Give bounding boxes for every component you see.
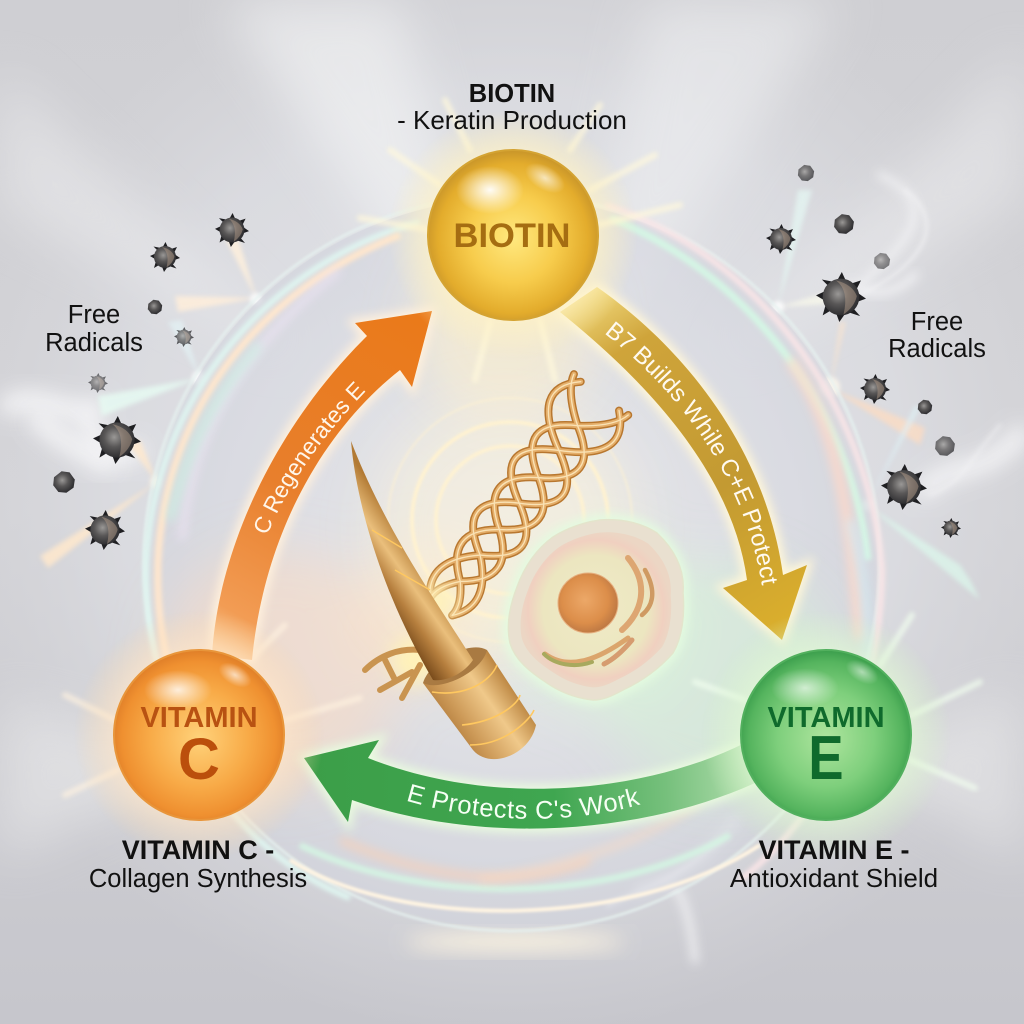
cell: [508, 520, 684, 700]
smoke clouds: [10, 175, 1020, 960]
label: E Protects C's Work: E Protects C's Work: [408, 784, 640, 819]
organelles: [544, 558, 652, 665]
caption: Free Radicals right: [888, 308, 986, 363]
caption: Vitamin E: [730, 835, 938, 893]
sphere: Vitamin C: [74, 610, 324, 860]
caption: Free Radicals right: Free: [911, 308, 963, 336]
caption: Vitamin E: VITAMIN E -: [758, 835, 910, 865]
caption: Biotin: BIOTIN: [469, 80, 555, 108]
arrow: B7 builds while C+E protect: [560, 284, 815, 645]
sphere: Vitamin C: C: [178, 727, 220, 792]
free radicals left: [53, 213, 249, 550]
sphere: Vitamin E: E: [808, 724, 844, 793]
arrow: C regenerates E: [210, 306, 435, 660]
caption: Vitamin C: VITAMIN C -: [122, 835, 274, 865]
caption: Free Radicals right: Radicals: [888, 335, 986, 363]
keratin rope: [410, 371, 632, 630]
nucleus: [558, 573, 618, 633]
light beams between radicals and bubble: [40, 190, 980, 600]
sphere: Vitamin E: [701, 610, 951, 860]
hair strand and follicle: [351, 441, 536, 759]
caption: Vitamin C: Collagen Synthesis: [89, 865, 307, 893]
label: BIOTIN: BIOTIN: [454, 217, 570, 255]
caption: Free Radicals left: Free: [68, 301, 120, 329]
free radicals right: [766, 165, 961, 538]
follicle base: [423, 647, 536, 759]
caption: Biotin: [397, 80, 627, 135]
label: VITAMIN E: VITAMIN: [767, 702, 885, 734]
caption: Vitamin C: [89, 835, 307, 893]
label: VITAMIN C: VITAMIN: [140, 702, 258, 734]
label: B7 Builds While C+E Protect: B7 Builds While C+E Protect: [606, 321, 777, 586]
sphere: Biotin: [388, 110, 638, 360]
arrow: E protects C's work: [300, 733, 754, 836]
caption: Free Radicals left: Radicals: [45, 329, 143, 357]
warm and green colour washes: [160, 240, 840, 800]
caption: Free Radicals left: [45, 301, 143, 357]
sphere glow rays: soft starbursts behind the arrows: [65, 100, 980, 795]
caption: Biotin: - Keratin Production: [397, 105, 627, 135]
centre halo rings: [375, 398, 635, 660]
hair shaft: [351, 441, 473, 680]
iridescent bubble: [144, 195, 882, 931]
label: C Regenerates E: C Regenerates E: [254, 381, 366, 532]
caption: Vitamin E: Antioxidant Shield: [730, 863, 938, 893]
